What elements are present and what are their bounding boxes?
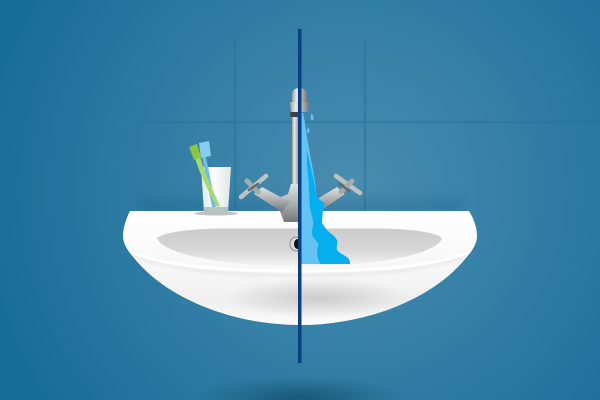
water drops (311, 113, 314, 120)
left handle (241, 176, 266, 197)
glass base (204, 207, 228, 214)
green toothbrush (189, 144, 220, 207)
sink underside shading (223, 278, 413, 318)
glass (201, 167, 231, 214)
right valve arm (312, 187, 345, 212)
water stream (300, 113, 350, 264)
overflow drain (290, 237, 302, 251)
floor shadow (195, 376, 405, 400)
toothbrush glass (189, 141, 238, 216)
spout head (290, 102, 309, 112)
light water layer (300, 113, 327, 264)
spout column (292, 112, 300, 196)
base (278, 184, 300, 222)
wall tile grid (140, 40, 600, 210)
blue toothbrush (199, 141, 216, 207)
vertical divider line (298, 29, 302, 363)
top cap (292, 88, 307, 103)
right handle (336, 176, 360, 193)
sink rim edge (126, 250, 474, 275)
dark water layer (307, 150, 350, 264)
basin (157, 228, 442, 266)
nozzle (290, 112, 300, 117)
left valve arm (254, 187, 290, 212)
glass shadow (194, 212, 238, 216)
sink (123, 211, 477, 325)
wall shadow above sink (138, 192, 462, 212)
faucet (241, 88, 360, 222)
sink body (123, 211, 477, 325)
